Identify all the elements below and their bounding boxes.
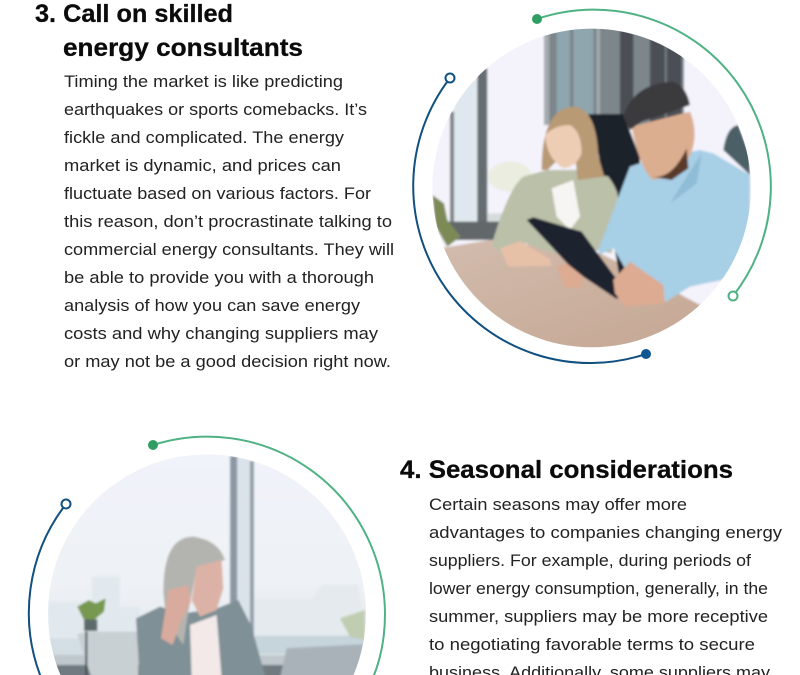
dot: green filled [148, 440, 158, 450]
text block: section 3 body: Timing the market is like predicting [64, 72, 343, 91]
arc: blue [413, 78, 646, 363]
tablet [527, 217, 627, 299]
table [444, 238, 701, 348]
photo: woman thinking at laptop [43, 448, 373, 675]
text block: section 4 body: suppliers. For example, during periods of [429, 551, 751, 570]
woman [136, 600, 267, 675]
text block: section 4 body: summer, suppliers may be more receptive [429, 607, 768, 626]
dot: green filled [532, 14, 542, 24]
text block: section 3 body: or may not be a good decision right now. [64, 352, 391, 371]
plant [432, 195, 461, 247]
dot: green ring [728, 292, 738, 300]
text block: section 3 body: fluctuate based on various factors. For [64, 184, 371, 203]
dot: blue filled [641, 349, 651, 359]
text block: section 3 body: analysis of how you can save energy [64, 296, 361, 315]
arc: blue [29, 504, 66, 675]
text block: section 3 body: be able to provide you with a thorough [64, 268, 374, 287]
text block: section 4 body: to negotiating favorable terms to secure [429, 635, 755, 654]
text block: section 4 body: Certain seasons may offer more [429, 495, 687, 514]
panel: circular photo of woman at laptop [29, 437, 385, 675]
text block: section 3 body: this reason, don’t procrastinate talking to [64, 212, 392, 231]
woman [492, 170, 618, 257]
arc: green [537, 10, 771, 296]
text block: section 3 body: costs and why changing suppliers may [64, 324, 379, 343]
heading: section 3: energy consultants [63, 34, 303, 62]
heading: section 3 [35, 0, 303, 62]
hands [557, 262, 665, 307]
plant [77, 598, 106, 620]
man shirt [598, 150, 750, 303]
mullion [230, 456, 237, 636]
text block: section 4 body: advantages to companies changing energy [429, 523, 783, 542]
heading: section 3: 3. Call on skilled [35, 0, 233, 28]
dot: blue ring [62, 500, 70, 508]
man head [632, 112, 695, 180]
dot: blue ring [446, 74, 454, 82]
window frames [454, 80, 477, 223]
arc: green [153, 437, 385, 675]
text block: section 3 body: market is dynamic, and prices can [64, 156, 341, 175]
text block: section 4 body [429, 495, 783, 675]
heading: section 4: 4. Seasonal considerations [400, 456, 733, 484]
chair [77, 632, 138, 675]
text block: section 3 body: earthquakes or sports comebacks. It’s [64, 100, 367, 119]
text block: section 3 body: commercial energy consultants. They will [64, 240, 394, 259]
chairs [587, 112, 642, 274]
text block: section 3 body [64, 72, 394, 371]
text block: section 4 body: lower energy consumption, generally, in the [429, 579, 768, 598]
panel: circular photo of two colleagues with tablet [413, 10, 771, 363]
laptop [279, 644, 363, 675]
curtains [544, 25, 684, 125]
photo: colleagues at table [427, 23, 757, 353]
text block: section 3 body: fickle and complicated. The energy [64, 128, 345, 147]
city haze [50, 578, 120, 606]
